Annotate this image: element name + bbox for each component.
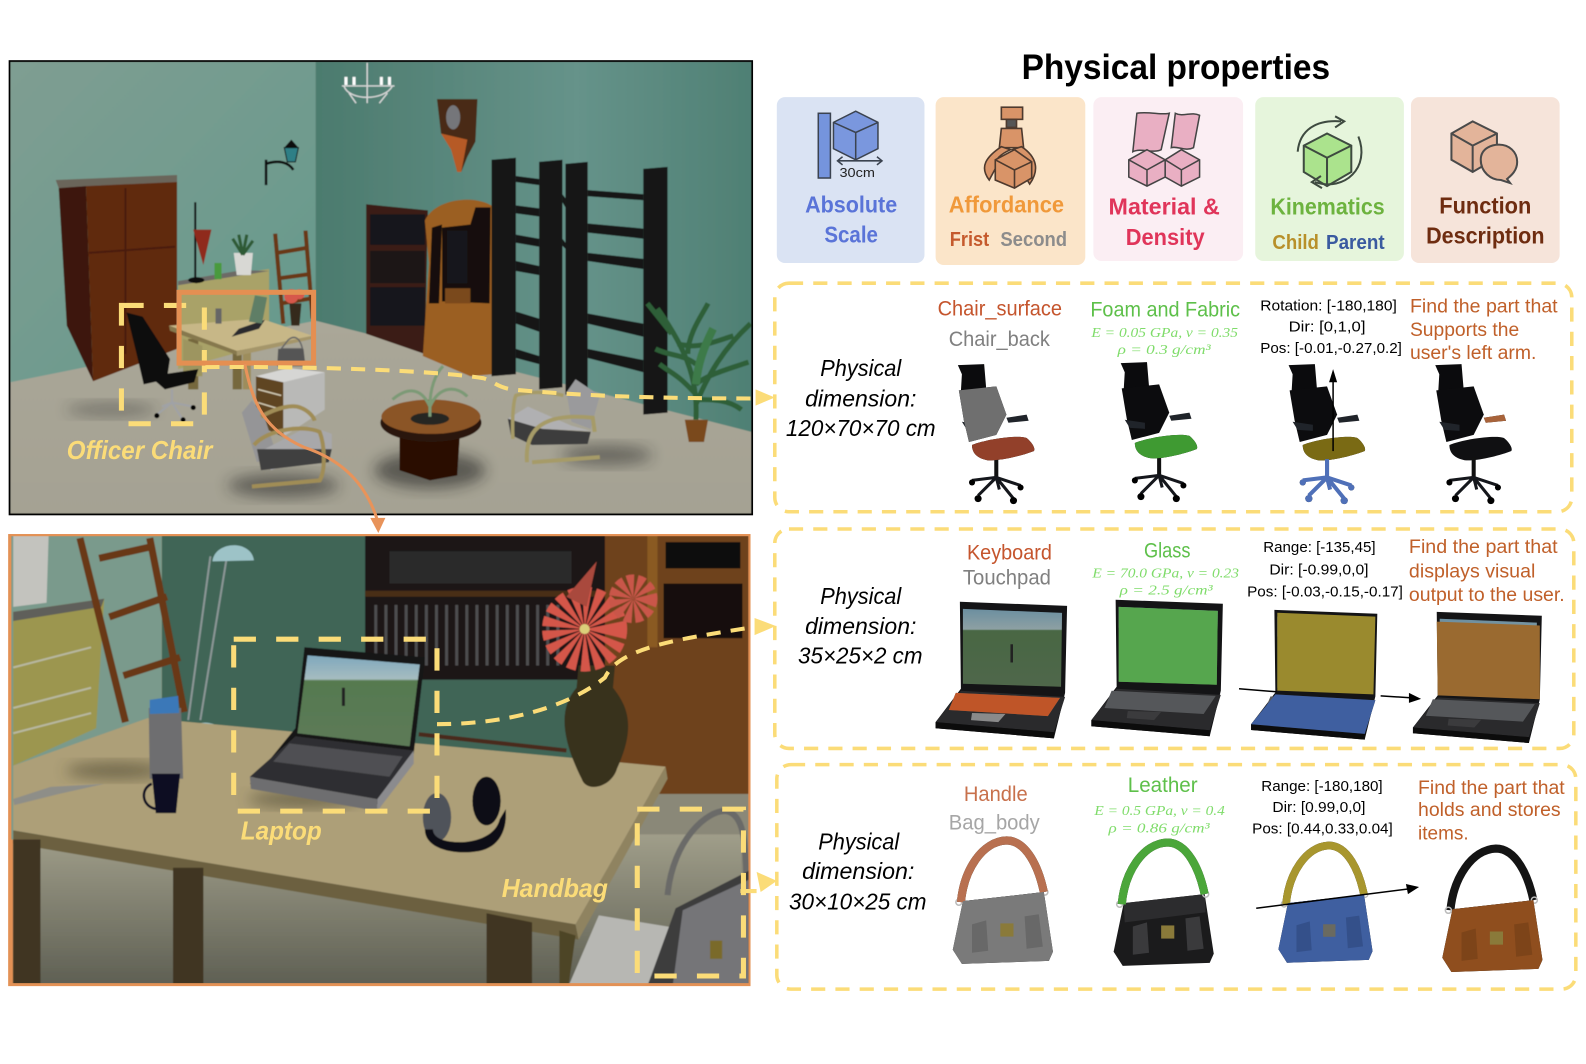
panel: function description card — [1411, 97, 1560, 263]
panel: full room scene — [9, 60, 753, 515]
arrow: axis of rotation — [1329, 369, 1337, 451]
physical dimension text: Physical — [820, 583, 902, 609]
panel: kinematics card — [1255, 97, 1404, 261]
side cabinet — [256, 368, 325, 437]
title: Physical properties — [1022, 48, 1330, 87]
ladder — [80, 538, 184, 722]
card label: Material & — [1109, 193, 1220, 219]
laptop: kinematics — [1251, 610, 1377, 740]
coffee table — [380, 366, 481, 480]
physical dimension text: Physical — [818, 829, 900, 855]
handbag: material — [1114, 843, 1214, 966]
drawers — [13, 536, 104, 766]
physical dimension text: 35×25×2 cm — [798, 642, 922, 668]
kinematics text: Pos: [0.44,0.33,0.04] — [1252, 820, 1393, 837]
armchair right — [508, 379, 600, 462]
card label — [949, 191, 1067, 251]
card label: Kinematics — [1270, 193, 1385, 219]
panel: handbag row — [777, 765, 1576, 989]
dresser and ladder behind desk — [178, 202, 313, 369]
arrow: yellow dashed to laptop row — [437, 618, 776, 724]
vase — [565, 666, 628, 787]
function text: displays visual — [1409, 562, 1535, 583]
wardrobe — [56, 175, 177, 381]
chair: material — [1121, 362, 1197, 502]
headphones — [423, 777, 506, 852]
panel: affordance card — [936, 97, 1085, 265]
material label: E = 70.0 GPa, ν = 0.23 — [1091, 566, 1239, 582]
bookcase — [366, 204, 428, 354]
card label: Description — [1426, 223, 1544, 249]
material label: Foam and Fabric — [1090, 299, 1240, 322]
handbag: part segmentation — [953, 840, 1053, 964]
panel: absolute scale card — [777, 97, 924, 263]
card label: Child — [1272, 232, 1319, 254]
callout box: officer chair region — [121, 305, 204, 424]
function text — [1409, 537, 1565, 606]
chair: part segmentation — [958, 364, 1034, 504]
material label — [1093, 774, 1225, 836]
kinematics text — [1260, 298, 1402, 357]
kinematics text: Range: [-135,45] — [1263, 539, 1376, 556]
function text: output to the user. — [1409, 585, 1565, 606]
label: Handbag: Handbag — [502, 873, 608, 903]
arrow: axis of rotation — [1256, 884, 1419, 908]
physical dimension text: Physical — [820, 355, 902, 381]
part labels: Keyboard — [967, 541, 1052, 564]
physical dimension text: dimension: — [805, 386, 916, 412]
card label — [1426, 192, 1544, 249]
icon: fabric and blocks — [1129, 113, 1200, 186]
physical dimension text: dimension: — [805, 613, 916, 639]
armchair left — [242, 401, 332, 486]
function text — [1418, 778, 1565, 844]
card label: Parent — [1326, 232, 1385, 254]
function text — [1410, 297, 1558, 364]
handbag close-up — [647, 811, 751, 986]
physical dimension text — [789, 829, 927, 914]
icon: gripper holding box — [984, 107, 1036, 188]
label: Laptop: Laptop — [241, 815, 322, 845]
kinematics text — [1247, 539, 1403, 601]
label: Officer Chair: Officer Chair — [67, 435, 214, 465]
panel: office chair row — [775, 283, 1572, 512]
water bottle — [149, 696, 183, 779]
part labels — [949, 783, 1040, 834]
mug — [144, 774, 180, 813]
chair: kinematics — [1289, 364, 1365, 504]
knife — [13, 784, 104, 805]
card label — [1109, 193, 1220, 250]
card label: Frist — [950, 229, 989, 251]
material label — [1090, 299, 1240, 358]
physical dimension text: dimension: — [802, 858, 914, 884]
part labels: Handle — [964, 783, 1028, 806]
part labels: Chair_surface — [938, 298, 1062, 321]
kinematics text: Dir: [0.99,0,0] — [1272, 799, 1365, 816]
wooden cabinet — [423, 200, 493, 376]
physical dimension text: 30×10×25 cm — [789, 888, 927, 914]
function text: Find the part that — [1409, 537, 1558, 558]
plant — [647, 303, 751, 442]
card label: Absolute — [805, 191, 897, 217]
card label: Density — [1126, 224, 1205, 250]
wall clock — [437, 99, 477, 172]
physical dimension text — [786, 355, 936, 441]
material label: ρ = 0.3 g/cm³ — [1116, 342, 1212, 358]
part labels: Touchpad — [963, 567, 1051, 590]
arrow: yellow dashed to handbag row — [740, 872, 777, 892]
icon: rotating cube — [1298, 116, 1361, 188]
wall lamp — [266, 140, 298, 185]
panel: laptop row — [775, 529, 1574, 748]
bookcase close-up — [365, 536, 608, 750]
kinematics text: Rotation: [-180,180] — [1260, 298, 1397, 315]
function text: Find the part that — [1418, 778, 1565, 799]
icon: ruler and cube: 30cm — [840, 165, 875, 180]
card label — [805, 191, 897, 248]
material label — [1091, 539, 1239, 599]
laptop: part segmentation — [936, 602, 1067, 738]
card label: Function — [1439, 192, 1531, 218]
kinematics text: Pos: [-0.01,-0.27,0.2] — [1260, 340, 1402, 357]
material label: ρ = 0.86 g/cm³ — [1107, 820, 1211, 836]
function text: user's left arm. — [1410, 343, 1536, 364]
function text: Find the part that — [1410, 297, 1558, 318]
panel: material and density card — [1093, 97, 1243, 261]
material label: Glass — [1144, 539, 1190, 562]
chandelier — [342, 63, 395, 103]
chair: function — [1435, 364, 1512, 504]
material label: E = 0.05 GPa, ν = 0.35 — [1090, 325, 1238, 341]
handbag: kinematics — [1278, 845, 1373, 963]
kinematics text: Range: [-180,180] — [1261, 778, 1383, 795]
flowers — [563, 561, 644, 650]
material label: ρ = 2.5 g/cm³ — [1118, 583, 1214, 599]
part labels — [963, 541, 1052, 590]
icon: cube with speech bubble — [1451, 121, 1517, 183]
handbag: function — [1442, 849, 1542, 972]
black shelves — [492, 158, 668, 415]
arrow: axis of rotation — [1239, 689, 1421, 703]
arrow: orange curve from desk to close-up — [245, 364, 385, 533]
kinematics text: Pos: [-0.03,-0.15,-0.17] — [1247, 584, 1403, 601]
laptop: material — [1091, 600, 1223, 736]
laptop close-up — [250, 647, 425, 811]
function text: Supports the — [1410, 320, 1519, 341]
card label: Affordance — [949, 191, 1064, 217]
part labels — [938, 298, 1062, 351]
wooden cabinet close-up — [605, 536, 748, 809]
laptop: function — [1413, 612, 1542, 743]
kinematics text — [1252, 778, 1393, 837]
card label: Scale — [824, 222, 878, 248]
kinematics text: Dir: [-0.99,0,0] — [1269, 561, 1368, 578]
panel: desk close-up scene — [8, 534, 751, 986]
icon: ruler and cube — [818, 111, 882, 180]
card label: Second — [1000, 229, 1067, 251]
material label: E = 0.5 GPa, ν = 0.4 — [1093, 803, 1225, 819]
desk lamp — [186, 544, 255, 725]
office chair in scene — [126, 313, 198, 422]
callout box: handbag region — [637, 809, 743, 976]
callout box: laptop region — [234, 639, 437, 811]
card label — [1270, 193, 1385, 254]
desk top — [13, 718, 741, 986]
kinematics text: Dir: [0,1,0] — [1289, 319, 1365, 336]
callout box: desk region — [179, 292, 314, 363]
physical dimension text — [798, 583, 922, 668]
part labels: Bag_body — [949, 811, 1040, 834]
function text: items. — [1418, 823, 1469, 844]
part labels: Chair_back — [949, 328, 1050, 351]
function text: holds and stores — [1418, 800, 1561, 821]
arrow: yellow dashed to chair row — [205, 367, 775, 406]
material label: Leather — [1128, 774, 1198, 797]
physical dimension text: 120×70×70 cm — [786, 415, 936, 441]
desk — [169, 289, 313, 389]
